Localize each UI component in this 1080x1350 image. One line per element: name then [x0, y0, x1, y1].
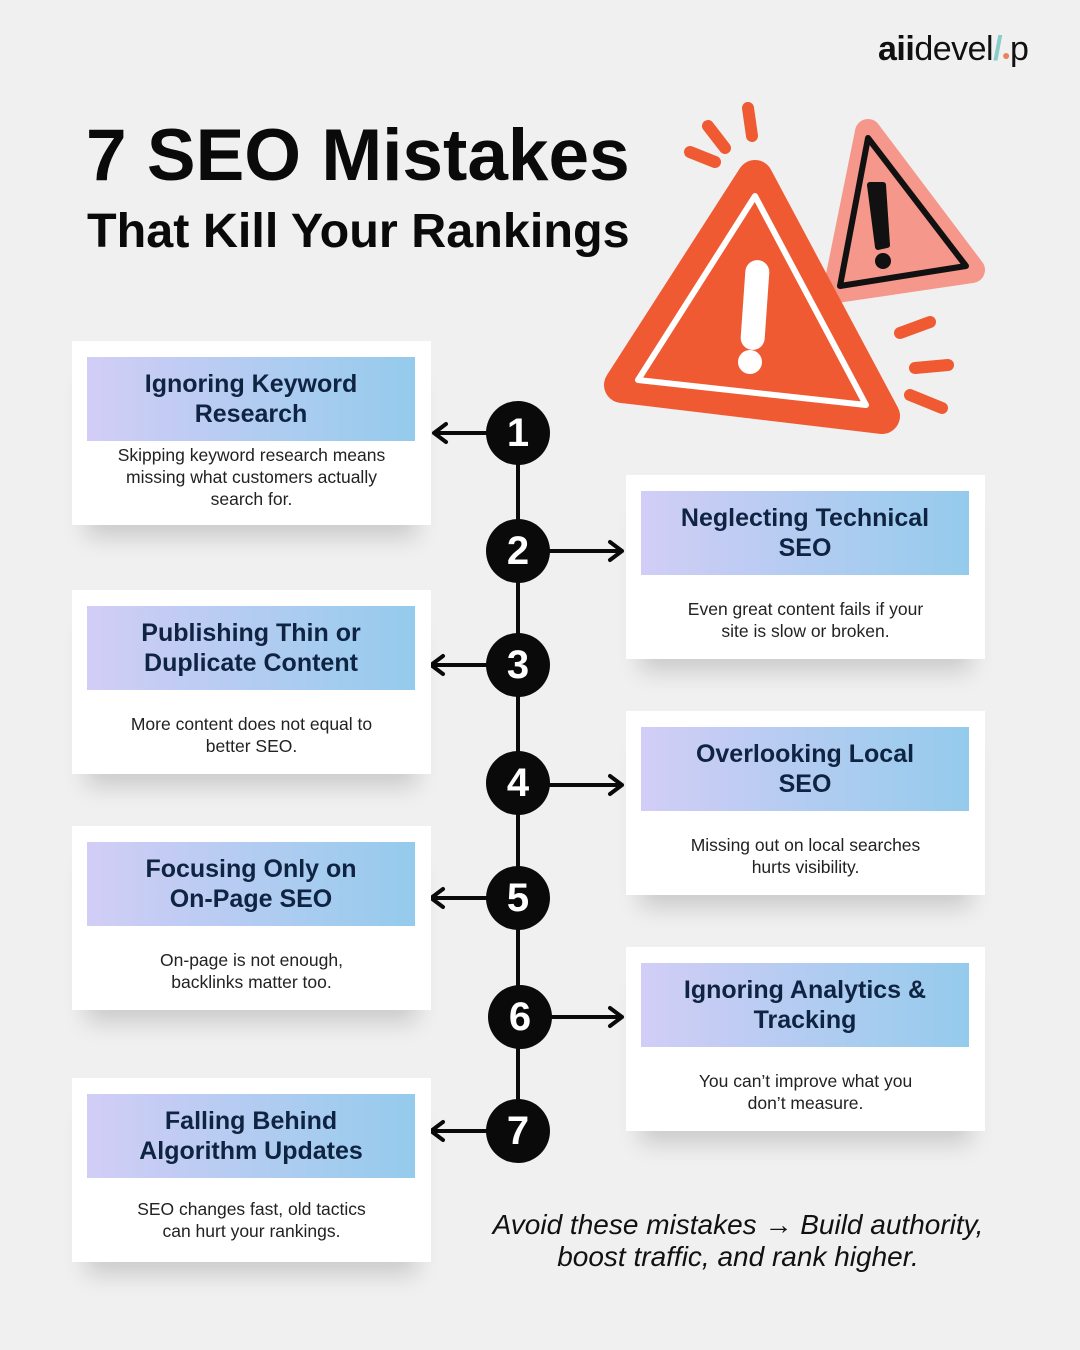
- card 4: Missing out on local searches: [691, 835, 920, 855]
- text: 2: [507, 528, 529, 572]
- card 4: hurts visibility.: [752, 857, 859, 877]
- card 1: missing what customers actually: [126, 467, 377, 487]
- text: 1: [507, 410, 529, 454]
- card 2: Even great content fails if your: [688, 599, 923, 619]
- card 6: [626, 947, 985, 1131]
- footer callout: Avoid these mistakes → Build authority,: [493, 1209, 983, 1240]
- card 2: Neglecting Technical: [681, 504, 929, 532]
- card 1: [72, 341, 431, 525]
- card 2: [626, 475, 985, 659]
- card 5: backlinks matter too.: [171, 972, 332, 992]
- card 7: can hurt your rankings.: [162, 1221, 340, 1241]
- card 5: On-Page SEO: [170, 885, 332, 913]
- card 3: [72, 590, 431, 774]
- logo: aiidevel/●p: [878, 30, 1028, 68]
- card 4: SEO: [779, 770, 831, 798]
- card 4: Overlooking Local: [696, 740, 914, 768]
- card 5: Focusing Only on: [145, 855, 357, 883]
- text: 3: [507, 642, 529, 686]
- text: 5: [507, 876, 529, 920]
- subtitle: That Kill Your Rankings: [87, 204, 630, 258]
- number circles: [486, 401, 552, 1163]
- card 1: Ignoring Keyword: [145, 370, 357, 398]
- text: 6: [509, 994, 531, 1038]
- card 7: Falling Behind: [165, 1107, 337, 1135]
- card 6: Tracking: [754, 1006, 856, 1034]
- card 7: Algorithm Updates: [139, 1137, 363, 1165]
- icon: warning triangles: [604, 102, 985, 434]
- card 1: Skipping keyword research means: [118, 445, 385, 465]
- text: 4: [507, 760, 529, 804]
- timeline line: [516, 433, 520, 1131]
- card 3: better SEO.: [206, 736, 297, 756]
- card 7: [72, 1078, 431, 1262]
- footer callout: boost traffic, and rank higher.: [557, 1241, 919, 1272]
- card 5: [72, 826, 431, 1010]
- card 3: Duplicate Content: [144, 649, 358, 677]
- footer callout: [491, 1209, 983, 1272]
- card 1: search for.: [211, 489, 292, 509]
- card 6: don’t measure.: [748, 1093, 863, 1113]
- card 6: Ignoring Analytics &: [684, 976, 926, 1004]
- card 5: On-page is not enough,: [160, 950, 343, 970]
- card 6: You can’t improve what you: [699, 1071, 912, 1091]
- card 2: SEO: [779, 534, 831, 562]
- title: 7 SEO Mistakes: [86, 115, 630, 196]
- card 7: SEO changes fast, old tactics: [137, 1199, 366, 1219]
- card 2: site is slow or broken.: [721, 621, 890, 641]
- card 4: [626, 711, 985, 895]
- card 1: Research: [195, 400, 307, 428]
- card 3: More content does not equal to: [131, 714, 372, 734]
- text: 7: [507, 1108, 529, 1152]
- card 3: Publishing Thin or: [141, 619, 361, 647]
